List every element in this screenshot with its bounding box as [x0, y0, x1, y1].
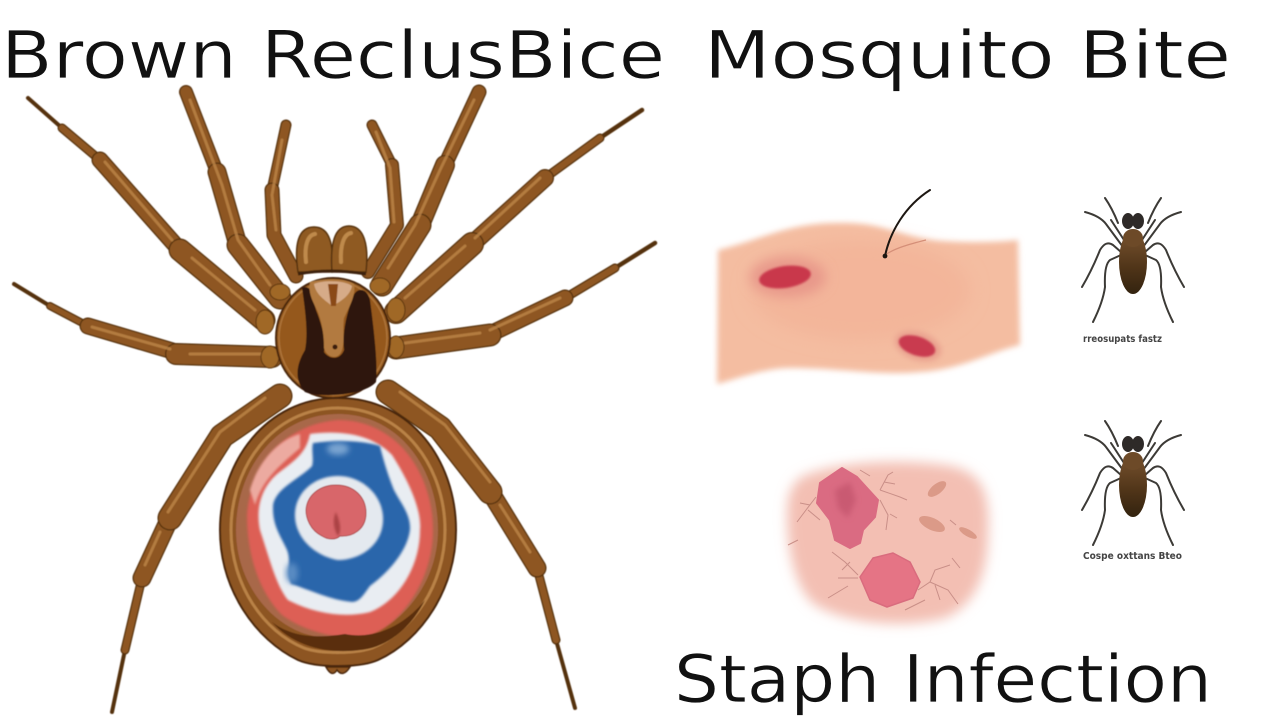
icon: mosquito lower	[1082, 421, 1184, 545]
spider chelicerae	[297, 226, 367, 274]
abdomen white ring	[295, 476, 383, 560]
spider palp: right	[368, 125, 397, 272]
abdomen red centre	[306, 485, 366, 539]
abdomen white band	[259, 433, 420, 615]
abdomen lower shadow band	[272, 600, 425, 651]
cephalothorax dark violin marking	[297, 287, 377, 395]
cephalothorax light violin	[309, 279, 354, 357]
spider leg: second right	[382, 92, 479, 285]
spider cephalothorax	[276, 278, 390, 398]
bite mark left	[750, 257, 826, 297]
spider leg: third left	[14, 284, 272, 357]
large lesion upper	[817, 468, 878, 548]
abdomen red band	[247, 420, 433, 638]
spider joints	[256, 278, 405, 368]
spider leg: third right	[396, 243, 655, 348]
spider leg: rear left	[112, 396, 280, 712]
large lesion lower	[860, 553, 920, 607]
title: Mosquito Bite heading: Mosquito Bite	[704, 17, 1231, 94]
abdomen spinnerets	[326, 667, 350, 673]
skin highlight	[750, 240, 970, 340]
skin patch	[717, 223, 1020, 384]
illustration: staph infection skin	[787, 462, 988, 624]
illustration: skin with mosquito bite marks	[717, 190, 1020, 384]
spider leg: second left	[186, 92, 280, 298]
abdomen rim	[220, 398, 456, 666]
bite mark lower right	[891, 325, 945, 367]
label: mosquito upper caption: rreosupats fastz	[1083, 334, 1162, 345]
spider leg: rear right	[388, 392, 575, 708]
lesion centre	[835, 482, 856, 518]
abdomen pink band	[236, 414, 438, 638]
branching veins	[788, 470, 960, 610]
label: mosquito lower caption: Cospe oxttans Bteo	[1083, 551, 1182, 562]
puncture dot	[883, 254, 887, 258]
title: Staph Infection heading: Staph Infection	[674, 641, 1212, 718]
title: Brown Recluse heading: Brown ReclusBice	[1, 17, 665, 94]
icon: mosquito upper	[1082, 198, 1184, 322]
infected skin patch	[787, 462, 988, 624]
bite crease	[885, 240, 926, 255]
mosquito proboscis line	[885, 190, 930, 256]
spider leg: front right	[396, 110, 642, 312]
spider palp: left	[272, 125, 296, 276]
spider abdomen	[220, 398, 456, 673]
illustration: brown recluse spider	[14, 92, 655, 712]
abdomen blue patch	[273, 441, 410, 602]
small oval spots	[917, 478, 978, 541]
spider leg: front left	[28, 98, 264, 320]
